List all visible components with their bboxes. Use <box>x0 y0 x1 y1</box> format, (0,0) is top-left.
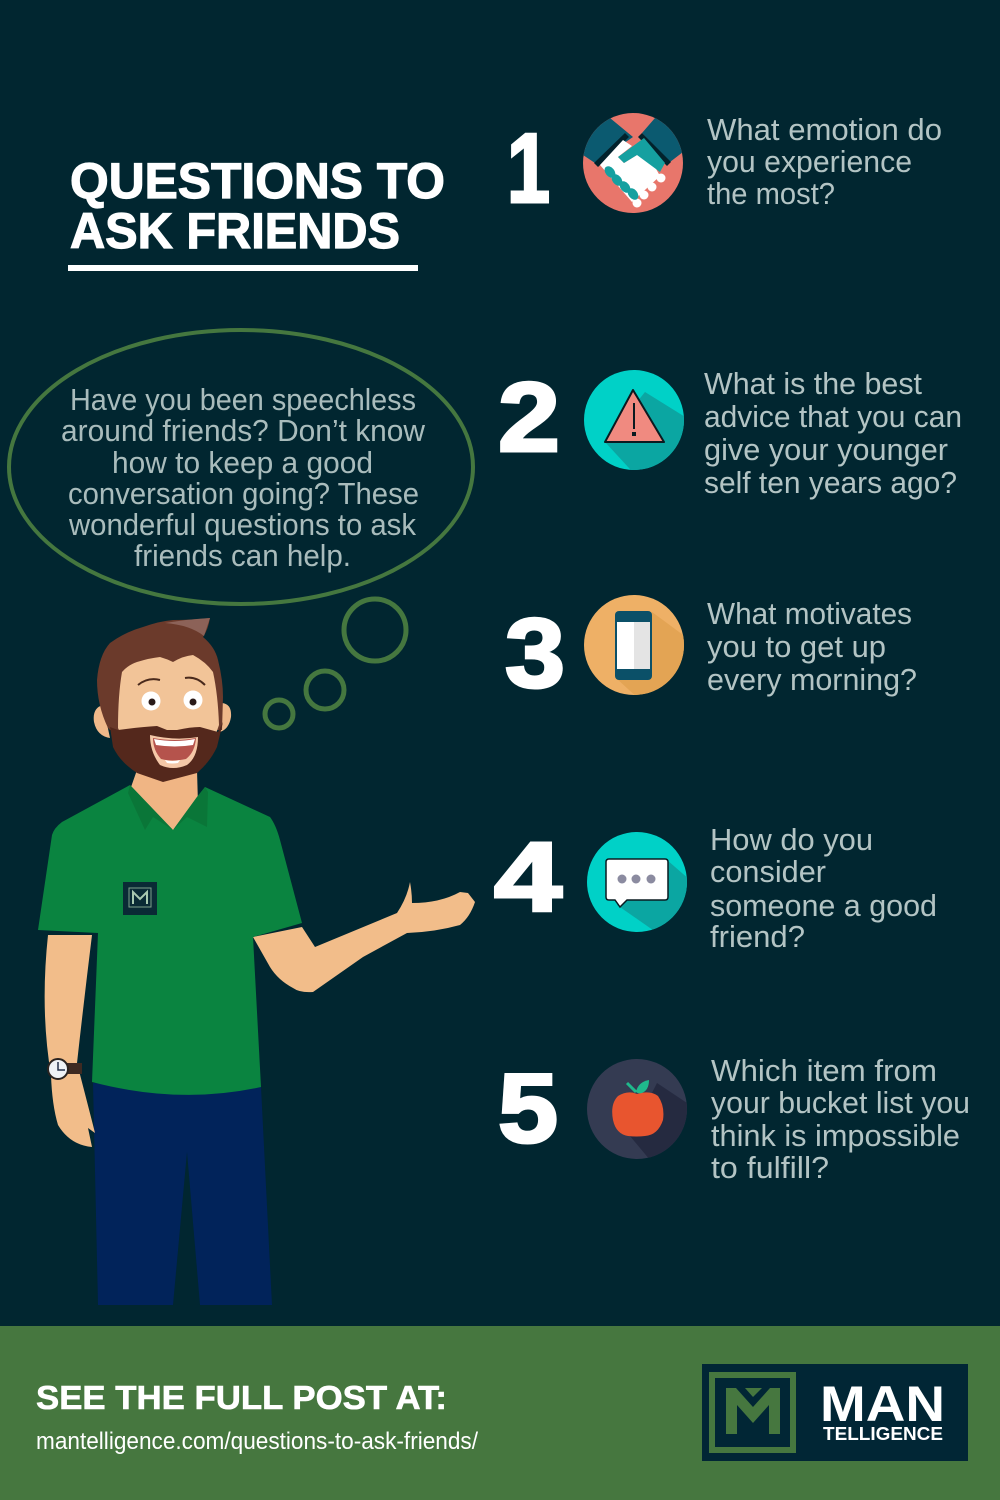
shirt badge <box>123 882 157 915</box>
numbers: 1 <box>507 113 550 223</box>
hand <box>600 140 660 202</box>
numbers: 5 <box>498 1053 558 1163</box>
beard <box>110 722 223 782</box>
watch <box>48 1059 82 1079</box>
icon: apple <box>587 1059 690 1160</box>
right arm <box>253 882 475 992</box>
pants <box>93 1083 272 1305</box>
bubble text: wonderful questions to ask <box>68 507 416 542</box>
question 4: someone a good <box>710 888 937 923</box>
question 2: self ten years ago? <box>704 465 957 500</box>
question 1 <box>707 112 942 211</box>
hair <box>97 618 223 730</box>
question 2: What is the best <box>704 366 922 401</box>
numbers: 4 <box>494 822 562 932</box>
eyes <box>138 678 205 710</box>
neck <box>130 770 198 832</box>
question 2 <box>704 366 962 500</box>
bubble text: how to keep a good <box>112 445 373 480</box>
face <box>118 655 219 765</box>
question 5: think is impossible <box>711 1118 960 1153</box>
bubble text: friends can help. <box>134 538 351 573</box>
question 3: every morning? <box>707 662 917 697</box>
question 3: What motivates <box>707 596 912 631</box>
question 3: you to get up <box>707 629 886 664</box>
mouth <box>150 735 198 768</box>
icon: warning <box>584 370 684 470</box>
thought circles <box>265 599 406 728</box>
icon: chat <box>587 832 690 935</box>
question 5 <box>711 1053 970 1185</box>
bubble text: conversation going? These <box>68 476 419 511</box>
logo: MAN <box>820 1376 945 1432</box>
footer heading: SEE THE FULL POST AT: <box>36 1379 447 1416</box>
question 2: advice that you can <box>704 399 962 434</box>
footer url: mantelligence.com/questions-to-ask-friends/ <box>36 1428 478 1455</box>
title <box>68 153 445 271</box>
question 5: your bucket list you <box>711 1085 970 1120</box>
numbers <box>494 113 565 1163</box>
question 4: How do you <box>710 822 873 857</box>
question 4: friend? <box>710 919 805 954</box>
question 3 <box>707 596 917 697</box>
collar <box>128 785 208 830</box>
speech bubble <box>9 330 473 604</box>
character: man <box>38 618 475 1305</box>
logo: TELLIGENCE <box>823 1424 943 1444</box>
question 5: Which item from <box>711 1053 937 1088</box>
icon: phone <box>584 595 684 695</box>
bubble text <box>61 382 426 573</box>
icon: handshake <box>583 113 683 213</box>
numbers: 2 <box>498 362 560 472</box>
shirt <box>38 785 302 1095</box>
bubble text: Have you been speechless <box>70 382 416 417</box>
logo <box>702 1364 968 1461</box>
left arm <box>45 935 95 1147</box>
title: ASK FRIENDS <box>70 203 400 259</box>
question 1: you experience <box>707 144 912 179</box>
question 4: consider <box>710 854 826 889</box>
bubble text: around friends? Don’t know <box>61 413 426 448</box>
footer band <box>0 1326 1000 1500</box>
question 1: What emotion do <box>707 112 942 147</box>
question 2: give your younger <box>704 432 948 467</box>
ears <box>94 703 231 738</box>
title: QUESTIONS TO <box>70 153 445 209</box>
question 5: to fulfill? <box>711 1150 829 1185</box>
question 4 <box>710 822 937 954</box>
numbers: 3 <box>505 598 565 708</box>
question 1: the most? <box>707 176 835 211</box>
